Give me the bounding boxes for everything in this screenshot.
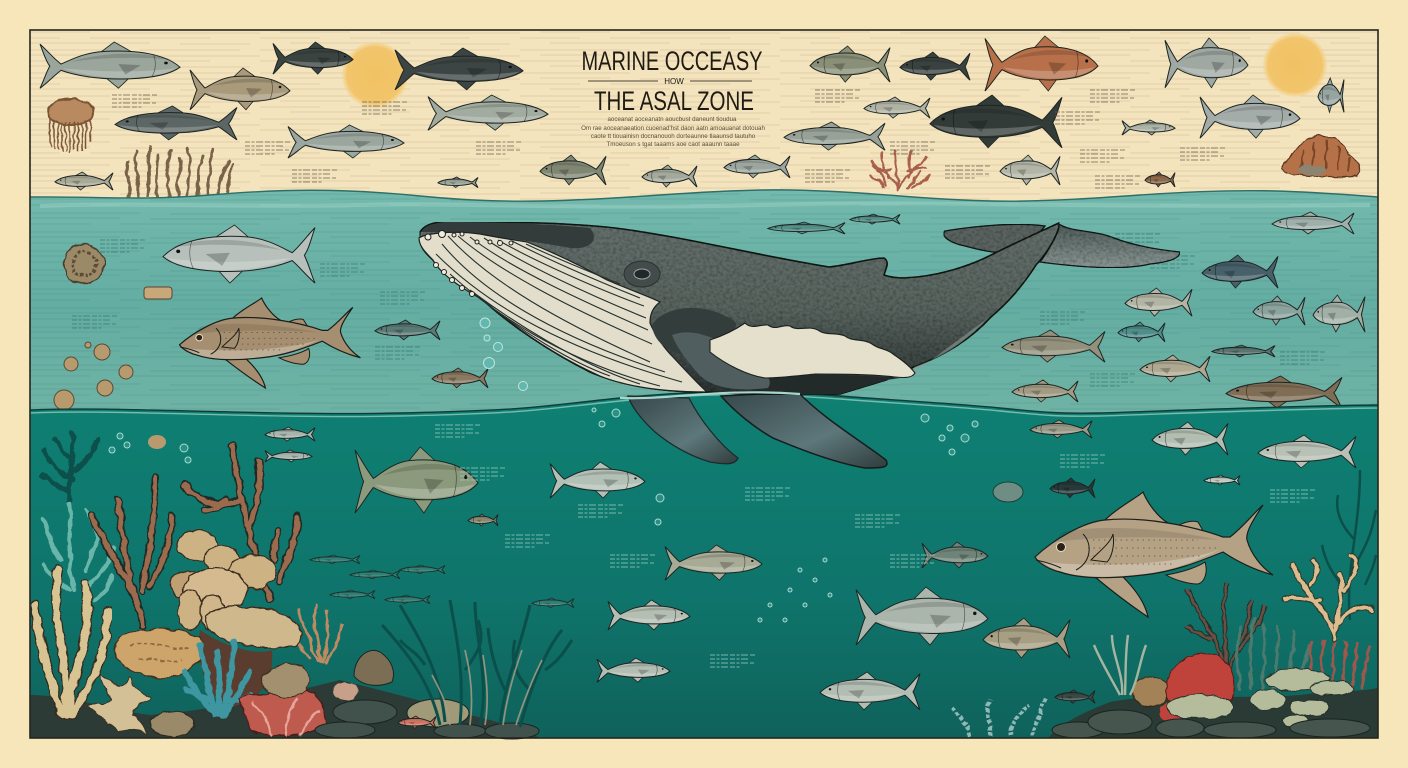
fish: tiny grey <box>438 177 478 188</box>
whale bubbles <box>480 318 528 390</box>
fish: pale low <box>597 658 670 682</box>
bubbles <box>109 408 978 622</box>
fish: round grey <box>1200 95 1300 138</box>
intro paragraph: caote tt tiouainisn docnanouoh dorteaunne tlaaunsd tautuho <box>591 133 756 140</box>
blue coral <box>184 642 250 715</box>
pale teal seaweed <box>44 505 115 600</box>
small pink coral <box>333 682 359 700</box>
coral top centre <box>870 150 928 190</box>
mushroom corals <box>1167 669 1354 727</box>
sponge cluster <box>170 530 301 648</box>
panel: deep water <box>30 392 1378 738</box>
fish: dark upper <box>900 52 970 80</box>
coral top right <box>1282 136 1360 177</box>
sea bed <box>30 680 540 738</box>
fish: pale small <box>1122 120 1175 135</box>
panel: surface band <box>30 30 1378 205</box>
fish: pale pair top <box>265 427 315 441</box>
fish: small <box>375 320 440 340</box>
head shadow <box>421 222 594 248</box>
fish: thin <box>1212 345 1275 357</box>
fish: grey large <box>784 122 885 150</box>
caption lines midwater <box>72 234 1326 386</box>
tan sponge <box>115 629 203 678</box>
small shell <box>144 287 172 299</box>
whale body <box>420 222 1059 395</box>
intro paragraph: Tmoeuson s tgat taaams aoe caot aaaunn taaae <box>606 141 740 148</box>
pale seaweed <box>1094 635 1146 695</box>
jaw tubercles <box>425 230 513 296</box>
sponge base <box>199 630 272 708</box>
near flipper <box>721 392 887 468</box>
brown gorgonian <box>92 445 298 625</box>
fish: tan <box>983 618 1070 658</box>
fish: big tan <box>180 298 360 388</box>
fish: upper right 1 <box>1030 420 1092 438</box>
fish: pale shark <box>40 42 180 88</box>
waterline across whale <box>620 392 800 398</box>
fish: small dark <box>1118 322 1165 342</box>
fish: pale <box>1125 288 1192 316</box>
sea bed <box>1048 688 1378 738</box>
title line 1: MARINE OCCEASY <box>582 46 762 76</box>
fish: round grey <box>1253 296 1305 325</box>
fish: olive upper <box>810 46 890 82</box>
fish: spiny <box>1165 38 1248 88</box>
fish: brown long <box>1226 376 1342 408</box>
fish: olive <box>540 155 606 185</box>
fish: pale stout <box>1000 155 1060 185</box>
fish: tiny <box>1318 78 1344 112</box>
seaweed top <box>127 147 232 197</box>
pale fingers <box>35 570 108 715</box>
fish: pale small left <box>55 172 113 190</box>
fish: brown turtle-like <box>432 368 488 388</box>
fish: grey large <box>856 587 988 645</box>
fish: tiny pale <box>1204 475 1240 485</box>
fish: dark shark <box>395 48 523 90</box>
sun left <box>342 42 408 108</box>
small dark fish <box>1055 690 1095 703</box>
fish: pale bottom <box>820 672 920 710</box>
fish: shoal left <box>310 555 574 608</box>
fish: small pebble <box>468 514 498 526</box>
fish: faint small <box>850 214 900 224</box>
plankton cluster <box>54 342 133 410</box>
shoulder <box>652 308 736 354</box>
small rounded coral <box>262 664 309 697</box>
brown sea fans <box>1186 582 1265 670</box>
fish: grey <box>864 97 930 118</box>
fish: round pale <box>1313 295 1365 332</box>
arm <box>672 332 770 389</box>
small red fish <box>398 716 436 728</box>
white flipper <box>710 323 915 378</box>
title connector: HOW <box>664 77 684 86</box>
caption lines top <box>112 90 1226 188</box>
small coral ball <box>993 482 1023 502</box>
green fan <box>1238 618 1310 690</box>
fish: olive <box>355 447 478 513</box>
fish: small olive <box>1012 380 1078 402</box>
pale rear belly <box>914 318 988 372</box>
fish: dark large <box>930 95 1062 148</box>
panel: midwater <box>30 190 1378 420</box>
reef: right <box>952 470 1378 738</box>
fish: upper right 3 <box>1258 435 1356 468</box>
intro paragraph: aoceanat aoceanatn aoucbust daneunt tioudua <box>607 116 737 123</box>
fish: upper right 2 <box>1152 422 1228 455</box>
fish: pale <box>550 462 645 498</box>
caption lines deep <box>435 425 1316 667</box>
tail flukes <box>944 224 1180 268</box>
fish: faint <box>768 222 845 234</box>
tan coral cluster <box>1132 677 1168 707</box>
intro paragraph <box>581 116 765 148</box>
fish: slate <box>115 106 237 140</box>
fish: grey long <box>428 95 548 130</box>
fish: dark blue <box>1202 255 1278 288</box>
rocks <box>1052 710 1370 738</box>
star coral <box>88 674 150 734</box>
dark weed <box>42 432 98 502</box>
orange fan <box>296 605 342 662</box>
rocks <box>315 650 539 739</box>
fish: pale <box>608 600 690 630</box>
fish: tan grey <box>1002 330 1105 362</box>
fish: pale <box>1140 355 1210 382</box>
jellyfish <box>48 99 94 153</box>
intro paragraph: Om rae aoceanaeation cuoenad'hst daon aatn amoauanat dotouah <box>581 125 765 132</box>
surface highlights <box>40 203 1370 207</box>
fish: tan <box>190 68 290 110</box>
fish: brown small <box>1145 172 1175 187</box>
coral ball <box>64 244 104 284</box>
fish: big tan <box>1035 492 1273 617</box>
reef: left <box>30 432 572 739</box>
faint fan upper right <box>1322 470 1376 620</box>
title <box>582 46 762 116</box>
red-brown fan <box>1310 640 1370 690</box>
humpback whale <box>419 222 1180 468</box>
branching weed <box>382 600 572 727</box>
fish: pale shark <box>163 225 315 283</box>
pink coral <box>240 690 327 735</box>
lower belly shadow <box>750 375 900 395</box>
fish: orange <box>985 36 1098 91</box>
fish: murky <box>922 542 988 568</box>
sun right <box>1263 33 1327 97</box>
small brain coral <box>150 711 194 737</box>
fish: dark small <box>273 42 353 74</box>
fish: tan grey <box>665 545 762 580</box>
fish: grey <box>288 125 404 158</box>
fish: grey small <box>724 155 790 178</box>
fish: pale top right <box>1272 212 1354 234</box>
ventral pleats <box>419 230 707 392</box>
title line 2: THE ASAL ZONE <box>594 86 754 116</box>
eye <box>624 261 660 287</box>
red coral <box>1159 653 1234 722</box>
pale branching coral <box>1284 555 1372 640</box>
blue white coral <box>952 698 1046 736</box>
fish: pale <box>642 165 697 187</box>
fish: dark small <box>1050 478 1095 498</box>
far flipper <box>628 396 738 464</box>
small shell top <box>148 435 166 449</box>
fish: pale pair lower <box>265 450 312 462</box>
